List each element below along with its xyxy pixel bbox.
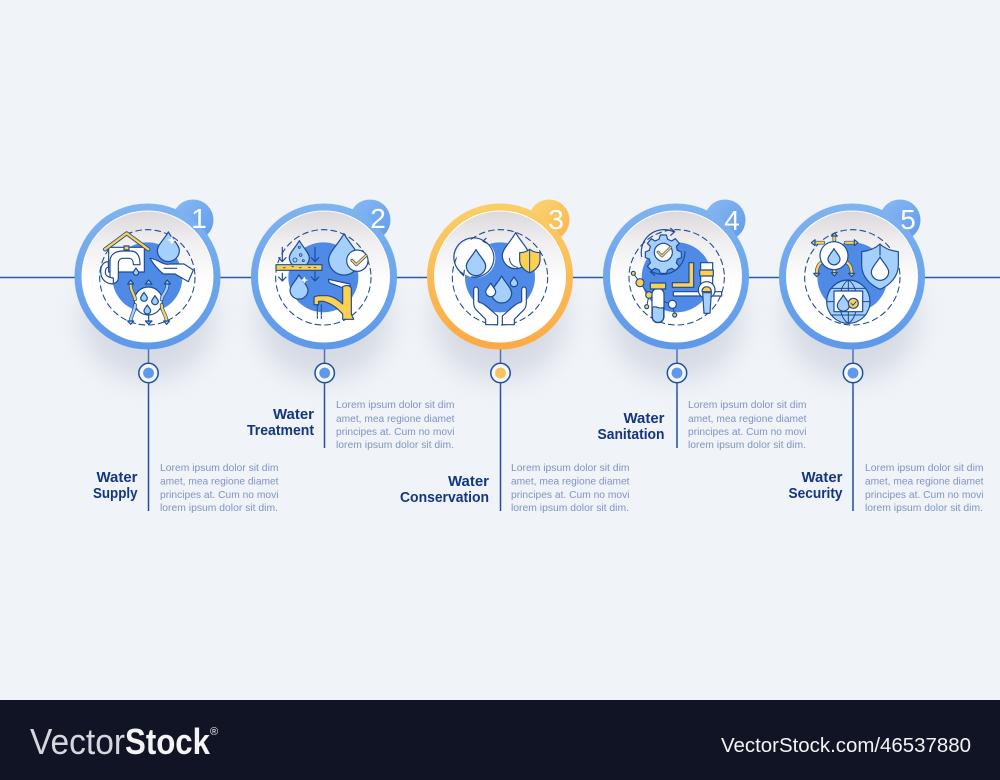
shadow 5 [786, 256, 918, 380]
title: water conservation: Conservation [400, 490, 489, 506]
badge 1 [172, 200, 214, 240]
description 2: amet, mea regione diamet [336, 413, 455, 425]
description 3: principes at. Cum no movi [511, 489, 630, 501]
description 4: principes at. Cum no movi [688, 426, 806, 438]
connector line 4 [676, 340, 678, 448]
description 5: Lorem ipsum dolor sit dim [865, 462, 984, 474]
node 2 [315, 363, 334, 383]
connector line 3 [500, 340, 502, 511]
ring 3 [427, 204, 573, 350]
plate 1 [82, 211, 213, 342]
icon: water security [805, 230, 900, 325]
step 4: water sanitation [598, 200, 807, 451]
step 1: water supply [74, 200, 279, 514]
shadow 1 [82, 256, 214, 380]
description 5: amet, mea regione diamet [865, 476, 984, 488]
shadow 3 [434, 256, 566, 380]
description 5: lorem ipsum dolor sit dim. [865, 502, 983, 514]
description 2: principes at. Cum no movi [336, 426, 454, 438]
ring 4 [603, 204, 749, 350]
connector line 1 [148, 340, 150, 511]
footer logo: VectorStock [30, 721, 223, 762]
description 1: Lorem ipsum dolor sit dim [160, 462, 279, 474]
footer bar [0, 700, 1000, 780]
node 3 [491, 363, 510, 383]
node 4 [667, 363, 687, 383]
title: water security: Water [802, 470, 843, 486]
title: water supply: Water [96, 470, 138, 486]
badge 2 [350, 200, 390, 240]
description 1: lorem ipsum dolor sit dim. [160, 502, 278, 514]
badge number 2: 2 [370, 203, 386, 234]
icon: water conservation [452, 230, 548, 325]
node 1 [139, 363, 158, 383]
title: water sanitation: Water [624, 411, 665, 427]
description 2: lorem ipsum dolor sit dim. [336, 439, 454, 451]
description 3: amet, mea regione diamet [511, 476, 630, 488]
description 4: lorem ipsum dolor sit dim. [688, 439, 806, 451]
description 4: Lorem ipsum dolor sit dim [688, 399, 807, 411]
connector line 2 [324, 340, 326, 448]
title: water treatment: Water [273, 407, 314, 423]
connector line 5 [852, 340, 854, 511]
description 4: amet, mea regione diamet [688, 413, 807, 425]
step 2: water treatment [247, 200, 455, 451]
footer url: VectorStock.com/46537880 [721, 735, 971, 757]
shadow 4 [610, 256, 742, 380]
step 5: water security [779, 200, 984, 514]
description 3: Lorem ipsum dolor sit dim [511, 462, 630, 474]
badge 4 [704, 200, 746, 240]
icon: water sanitation [629, 228, 724, 325]
badge 5 [880, 200, 920, 240]
icon: water treatment [276, 230, 371, 325]
footer logo: ® [210, 726, 218, 738]
title: water treatment: Treatment [247, 423, 314, 439]
ring 5 [779, 204, 925, 350]
shadow 2 [258, 256, 390, 380]
horizontal timeline [0, 276, 1000, 278]
ring 2 [251, 204, 397, 350]
plate 4 [610, 211, 742, 342]
title: water security: Security [788, 486, 842, 502]
plate 2 [258, 211, 390, 342]
badge number 5: 5 [900, 204, 916, 235]
title: water sanitation: Sanitation [598, 427, 664, 443]
node 5 [843, 363, 863, 383]
step 3: water conservation [400, 200, 630, 514]
badge number 1: 1 [191, 203, 207, 234]
description 3: lorem ipsum dolor sit dim. [511, 502, 629, 514]
description 1: amet, mea regione diamet [160, 476, 279, 488]
description 2: Lorem ipsum dolor sit dim [336, 399, 455, 411]
plate 3 [434, 211, 566, 342]
badge 3 [528, 200, 570, 240]
title: water conservation: Water [448, 474, 489, 490]
title: water supply: Supply [93, 486, 138, 502]
badge number 4: 4 [724, 205, 740, 236]
ring 1 [74, 204, 220, 350]
description 1: principes at. Cum no movi [160, 489, 278, 501]
icon: water supply [100, 230, 195, 325]
description 5: principes at. Cum no movi [865, 489, 984, 501]
badge number 3: 3 [548, 204, 564, 235]
plate 5 [786, 211, 918, 342]
